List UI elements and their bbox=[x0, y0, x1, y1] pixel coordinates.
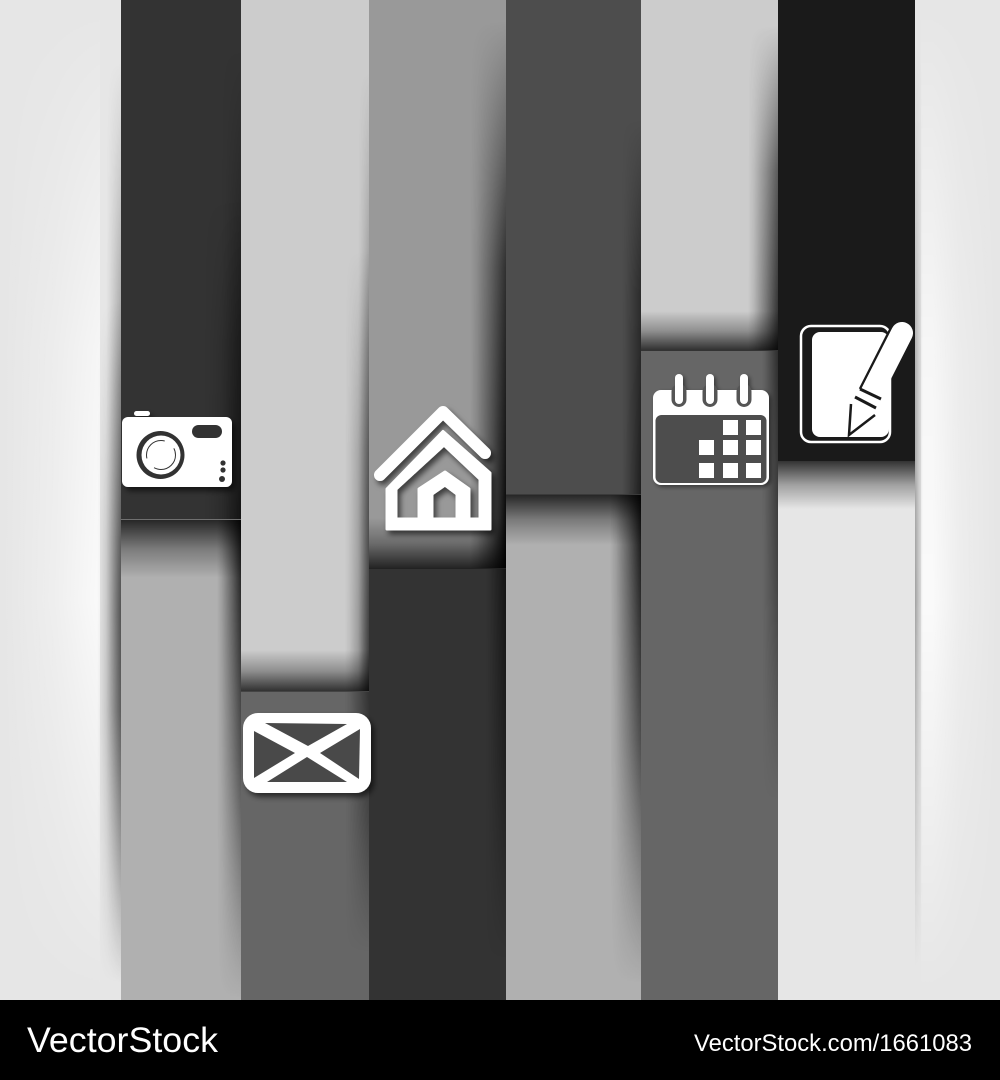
strip 6: black top and pale bottom bbox=[778, 0, 915, 1000]
footer logo text: VectorStock bbox=[27, 1021, 219, 1060]
strip 4: dark grey top and grey bottom bbox=[506, 0, 641, 1000]
strip 2: light top and dark bottom bbox=[241, 0, 369, 1000]
strip 3: mid grey top and charcoal bottom bbox=[369, 0, 506, 1000]
strip 5: light top and dark grey bottom bbox=[641, 0, 778, 1000]
calendar date squares bbox=[699, 420, 761, 478]
icon: envelope bbox=[243, 713, 371, 793]
footer image id text: VectorStock.com/1661083 bbox=[694, 1030, 972, 1057]
strip 1: dark top and grey bottom bbox=[121, 0, 241, 1000]
icon: house bbox=[380, 412, 490, 529]
icon: calendar bbox=[653, 374, 769, 485]
calendar rings bbox=[672, 374, 752, 407]
footer bar bbox=[0, 1000, 1000, 1080]
icon: camera bbox=[122, 411, 232, 487]
icon: notepad and pencil bbox=[801, 326, 902, 442]
